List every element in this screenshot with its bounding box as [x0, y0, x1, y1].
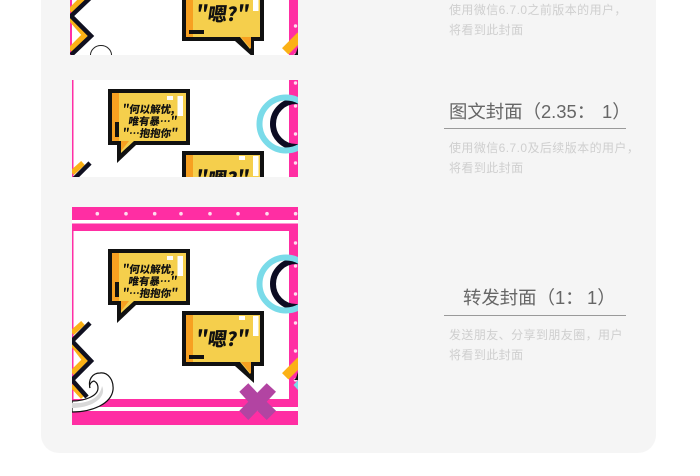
text block: top cover description: [449, 2, 627, 37]
heading: share cover: 转发封面（1：: [463, 287, 584, 308]
text block: article cover description: 使用微信6.7.0及后续版本的用户，: [449, 140, 639, 155]
text block: top cover description: 将看到此封面: [449, 23, 524, 37]
panel: top cover preview: [70, 0, 298, 55]
heading: article cover: ）: [612, 101, 631, 122]
heading: share cover: ）: [597, 287, 616, 308]
heading: article cover: 图文封面（2.35：: [449, 101, 595, 122]
heading: share cover: 1: [587, 287, 597, 308]
heading: article cover: 1: [602, 101, 612, 122]
panel: share cover preview: "…抱抱你": [121, 286, 179, 301]
panel: article cover preview: [72, 80, 298, 192]
panel: share cover preview: "何以解忧,: [121, 262, 176, 277]
heading: share cover: [444, 287, 626, 316]
text block: article cover description: 将看到此封面: [449, 161, 524, 175]
panel: article cover preview: "何以解忧,: [121, 102, 176, 117]
panel: share cover preview: [72, 207, 298, 425]
text block: share cover description: [449, 327, 623, 362]
panel: article cover preview: 唯有暴…": [127, 114, 178, 129]
text block: top cover description: 使用微信6.7.0之前版本的用户，: [449, 2, 627, 17]
text block: article cover description: [449, 140, 639, 175]
text block: share cover description: 发送朋友、分享到朋友圈，用户: [449, 327, 623, 342]
panel: share cover preview: "嗯?": [194, 325, 251, 352]
text block: share cover description: 将看到此封面: [449, 348, 524, 362]
panel: article cover preview: "…抱抱你": [121, 126, 179, 141]
panel: share cover preview: 唯有暴…": [127, 274, 178, 289]
panel: top cover preview: "嗯?": [194, 0, 251, 27]
panel: article cover preview: "嗯?": [194, 165, 251, 192]
heading: article cover: [444, 101, 631, 129]
